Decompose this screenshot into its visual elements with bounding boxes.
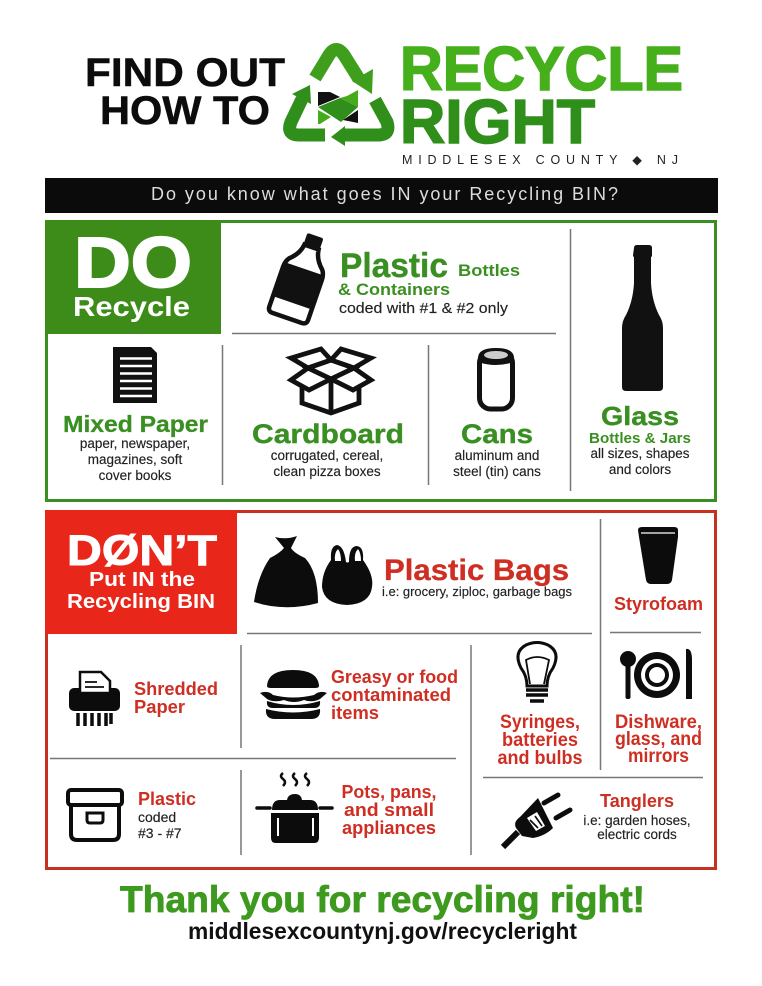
item: plastic bottles text: Bottles [458,261,520,280]
icon: recycle logo [290,50,388,146]
item: dishware text: glass, and [615,729,702,750]
item: greasy text: items [331,702,379,723]
logo wordmark: recycle right: RECYCLE [400,35,683,104]
website url: middlesexcountynj.gov/recycleright [188,918,577,944]
item: cans text [453,419,541,479]
icon: styrofoam cup [638,527,678,584]
item: tanglers text: i.e: garden hoses, [583,813,691,828]
item: greasy text [331,666,458,723]
item: glass text: all sizes, shapes [590,446,690,461]
item: cardboard text [252,419,404,479]
item: plastic bottles text [338,247,520,317]
item: shredded paper text [134,679,218,717]
item: plastic coded text [138,789,196,841]
banner: question [45,178,718,213]
item: styrofoam text: Styrofoam [614,594,703,614]
logo wordmark: recycle right [400,35,683,167]
icon: plastic bags [254,536,372,607]
item: syringes text [498,712,582,769]
item: plastic bags text: i.e: grocery, ziploc, garbage bags [382,584,572,599]
icon: can [478,348,514,409]
icon: mixed paper [113,347,157,403]
heading block: do recycle [45,220,221,334]
item: syringes text: batteries [502,730,578,751]
heading block: do recycle: DO [74,224,192,303]
item: syringes text: Syringes, [500,712,580,733]
item: cans text: Cans [461,419,533,449]
icon: burger [260,670,327,719]
item: glass text: Glass [601,401,679,431]
item: mixed paper text: Mixed Paper [63,411,208,437]
icon: shredder [69,672,120,726]
item: cans text: steel (tin) cans [453,464,541,479]
item: tanglers text: electric cords [597,827,677,842]
item: greasy text: Greasy or food [331,666,458,687]
item: cans text: aluminum and [455,448,539,463]
item: dishware text: Dishware, [615,712,702,733]
item: mixed paper text: magazines, soft [88,452,183,467]
item: plastic bags text: Plastic Bags [384,554,569,587]
icon: electric plug [503,795,570,847]
item: greasy text: contaminated [331,684,451,705]
item: cardboard text: corrugated, cereal, [271,448,383,463]
heading block: don't: Recycling BIN [67,591,215,613]
logo wordmark: recycle right: MIDDLESEX COUNTY ◆ NJ [402,153,678,167]
heading: find out how to: FIND OUT [85,51,285,95]
icon: wine bottle [622,245,663,391]
heading block: do recycle: Recycle [73,291,190,322]
item: pots text [342,782,436,838]
heading: find out how to: HOW TO [100,89,270,133]
icon: dishware [620,649,692,699]
item: mixed paper text: cover books [99,468,172,483]
heading block: don't: Put IN the [89,569,195,591]
item: tanglers text [583,790,691,842]
item: plastic coded text: #3 - #7 [138,825,182,841]
item: dishware text: mirrors [628,746,689,767]
item: tanglers text: Tanglers [600,790,674,811]
item: pots text: Pots, pans, [342,782,436,802]
item: plastic bottles text: & Containers [338,280,450,299]
item: cardboard text: clean pizza boxes [273,464,381,479]
closing: thank you: Thank you for recycling right! [120,879,645,920]
item: plastic bottles text: coded with #1 & #2 only [339,300,509,317]
item: plastic bottles text: Plastic [340,247,448,285]
icon: plastic container [68,790,122,840]
item: dishware text [615,712,702,767]
heading block: don't [45,510,237,634]
heading block: don't: DØN’T [67,527,217,575]
item: glass text [589,401,691,477]
item: shredded paper text: Paper [134,697,185,717]
icon: lightbulb [518,642,556,701]
item: plastic coded text: Plastic [138,789,196,809]
logo wordmark: recycle right: RIGHT [400,88,595,157]
item: glass text: and colors [609,462,671,477]
item: plastic coded text: coded [138,809,176,825]
item: shredded paper text: Shredded [134,679,218,699]
item: mixed paper text: paper, newspaper, [80,436,190,451]
panel: do recycle [45,220,716,500]
icon: pot with steam [257,773,332,843]
item: glass text: Bottles & Jars [589,430,691,447]
item: pots text: appliances [342,818,436,838]
icon: cardboard box [291,349,371,413]
item: cardboard text: Cardboard [252,419,404,449]
item: mixed paper text [63,411,208,483]
panel: don't recycle [45,510,716,868]
item: syringes text: and bulbs [498,748,582,769]
item: pots text: and small [344,800,434,820]
heading: find out how to [85,51,285,133]
item: plastic bags text [382,554,572,599]
banner: question: Do you know what goes IN your Recycling BIN? [151,184,618,204]
icon: plastic bottle [268,229,335,325]
